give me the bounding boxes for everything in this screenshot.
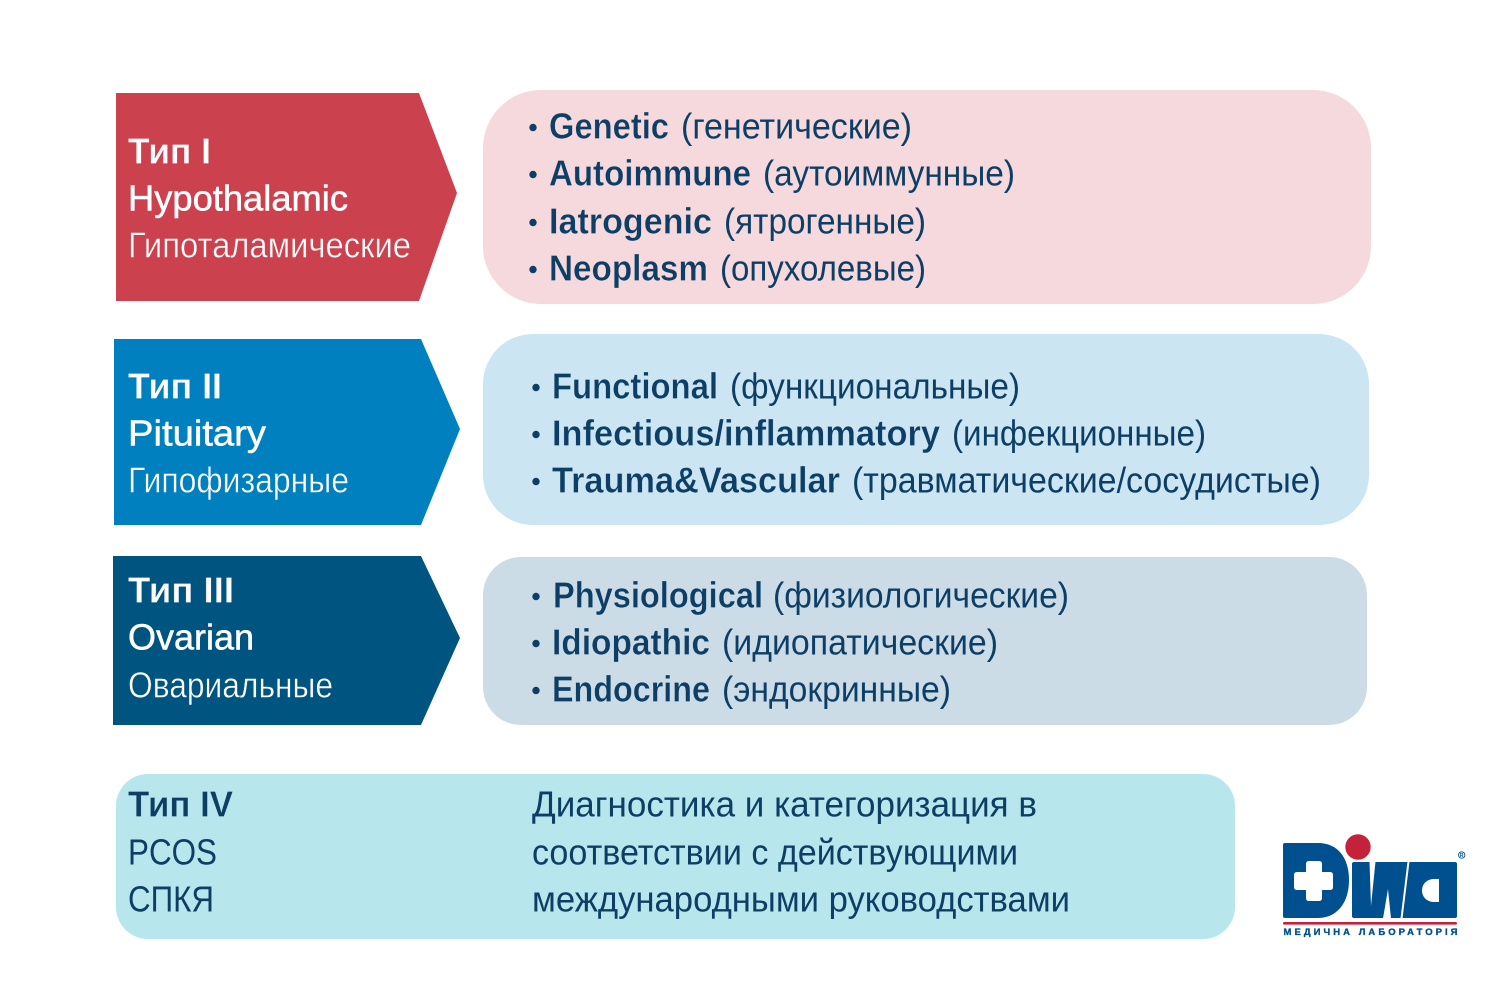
arrow panel: type III: Овариальные <box>128 664 333 705</box>
arrow panel: type II: Тип II <box>128 365 222 406</box>
arrow panel: type I: Hypothalamic <box>128 177 348 218</box>
panel: type II causes <box>483 334 1369 525</box>
panel: type IV PCOS: Диагностика и категоризация в <box>532 783 1037 824</box>
panel: type IV PCOS: соответствии с действующими <box>532 831 1018 872</box>
panel: type I causes: (ятрогенные) <box>724 200 926 241</box>
panel: type I causes: (аутоиммунные) <box>763 152 1015 193</box>
panel: type III causes: (эндокринные) <box>722 668 951 709</box>
panel: type III causes: Endocrine <box>552 668 710 709</box>
panel: type III causes: (идиопатические) <box>722 621 998 662</box>
panel: type II causes: Functional <box>552 365 718 406</box>
panel: type I causes: Genetic <box>549 105 669 146</box>
panel: type IV PCOS: Тип IV <box>128 783 233 824</box>
panel: type III causes: Idiopathic <box>552 621 710 662</box>
panel: type III causes: Physiological <box>553 574 763 615</box>
panel: type I causes: (генетические) <box>681 105 912 146</box>
panel: type III causes: (физиологические) <box>773 574 1069 615</box>
arrow panel: type III <box>113 556 460 725</box>
arrow panel: type II: Pituitary <box>128 412 266 453</box>
panel: type IV PCOS: СПКЯ <box>128 878 214 919</box>
panel: type II causes: (инфекционные) <box>952 412 1206 453</box>
logo: Dila laboratory: R <box>1460 853 1464 859</box>
logo: Dila laboratory: МЕДИЧНА ЛАБОРАТОРІЯ <box>1284 927 1458 938</box>
panel: type III causes <box>483 557 1367 725</box>
panel: type IV PCOS: международными руководствами <box>532 878 1070 919</box>
panel: type I causes <box>483 90 1371 304</box>
panel: type II causes: Infectious/inflammatory <box>552 412 940 453</box>
panel: type I causes: (опухолевые) <box>720 247 926 288</box>
panel: type I causes: Neoplasm <box>549 247 708 288</box>
panel: type IV PCOS: PCOS <box>128 831 217 872</box>
logo: Dila laboratory <box>1283 834 1465 938</box>
arrow panel: type I <box>116 93 457 301</box>
arrow panel: type III: Ovarian <box>128 616 254 657</box>
panel: type II causes: (функциональные) <box>730 365 1020 406</box>
arrow panel: type II <box>114 339 460 525</box>
arrow panel: type II: Гипофизарные <box>128 459 349 500</box>
panel: type II causes: Trauma&Vascular <box>552 459 840 500</box>
panel: type II causes: (травматические/сосудистые) <box>852 459 1321 500</box>
arrow panel: type III: Тип III <box>128 569 234 610</box>
arrow panel: type I: Тип I <box>128 130 211 171</box>
panel: type I causes: Iatrogenic <box>549 200 712 241</box>
panel: type I causes: Autoimmune <box>549 152 751 193</box>
arrow panel: type I: Гипоталамические <box>128 224 411 265</box>
panel: type IV PCOS <box>116 774 1235 939</box>
